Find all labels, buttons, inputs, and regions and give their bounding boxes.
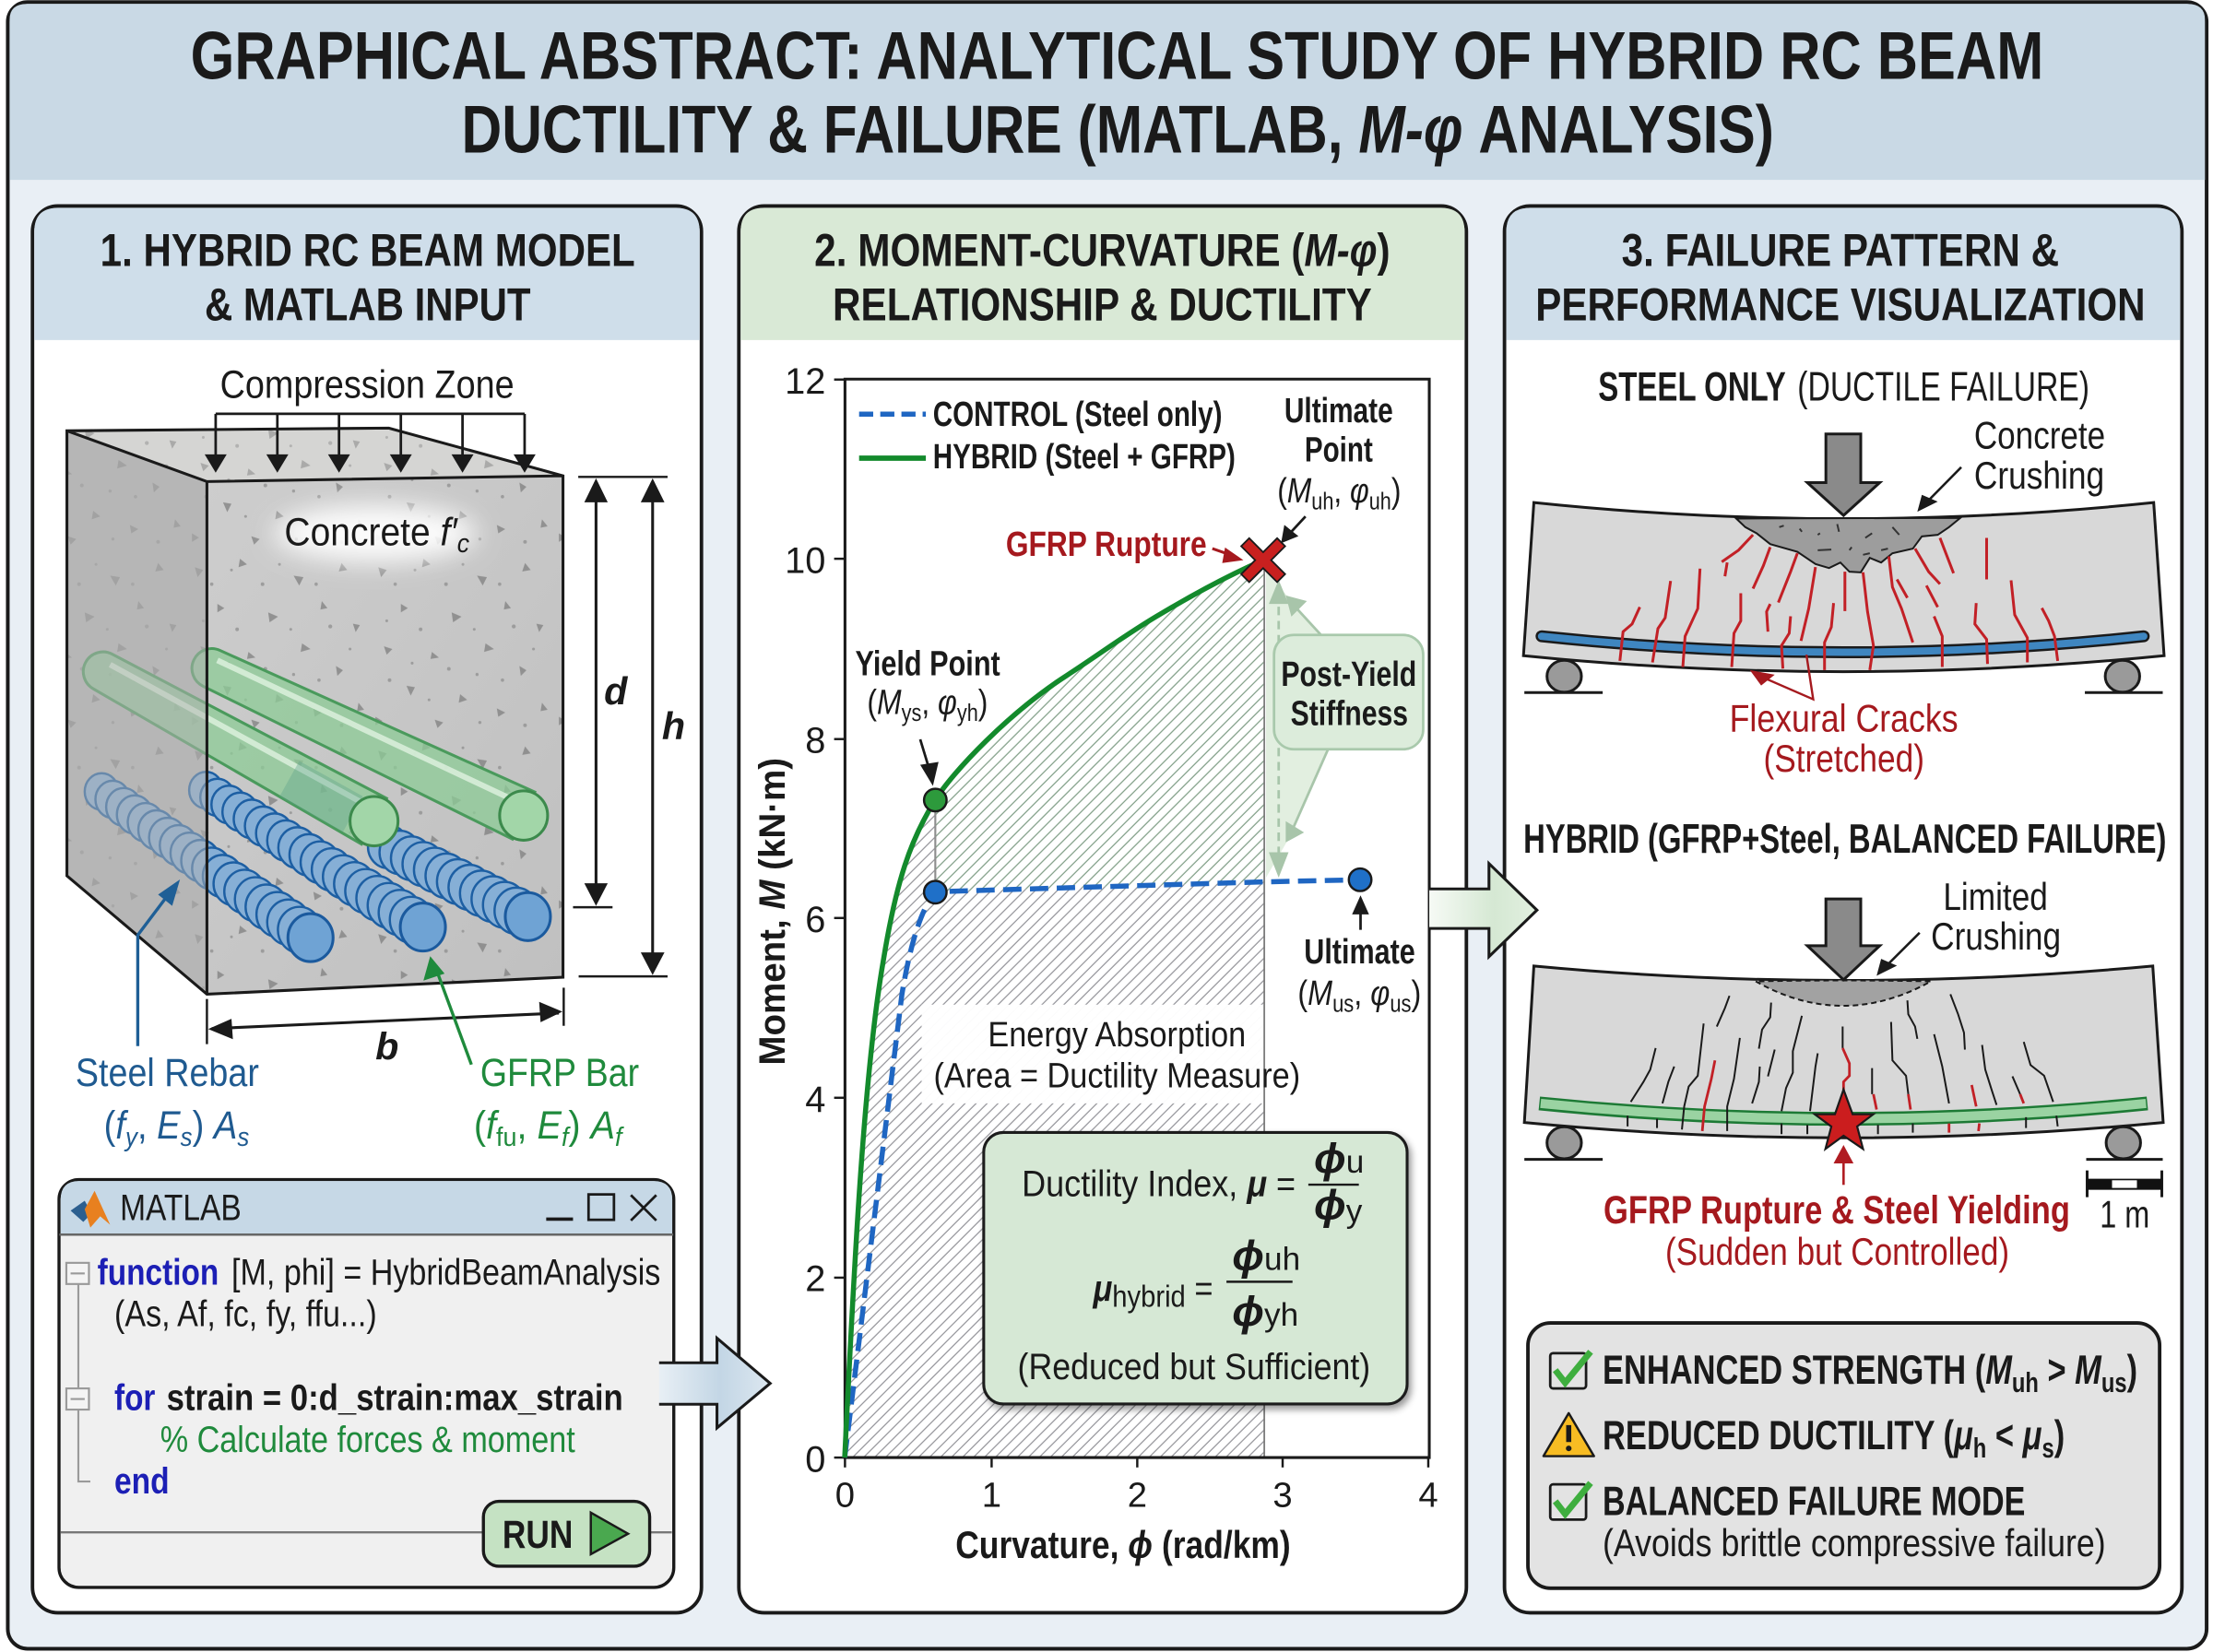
x axis tick labels [835, 1476, 1438, 1516]
GFRP bar callout: fu [496, 1123, 517, 1152]
limited crushing label [1931, 876, 2061, 958]
limited crushing label: Crushing [1931, 915, 2061, 958]
panel 1 heading: & MATLAB INPUT [205, 277, 531, 330]
post-yield stiffness callout: Post-Yield [1281, 655, 1416, 694]
legend [859, 395, 1236, 477]
steel rebar callout: (f [104, 1103, 126, 1148]
hybrid yield point marker: φ [938, 682, 957, 722]
summary box: M [2075, 1348, 2102, 1393]
panel 1: hybrid RC beam model and MATLAB input [32, 206, 702, 1612]
steel rebar callout: s [181, 1123, 193, 1152]
concrete crushing label [1974, 415, 2105, 497]
hybrid yield point marker: yh [957, 699, 978, 726]
GFRP bar [1539, 1103, 2148, 1119]
legend: HYBRID (Steel + GFRP) [933, 437, 1236, 477]
dimension h [579, 478, 685, 976]
MATLAB code: strain = 0:d_strain:max_strain [167, 1377, 623, 1418]
dimension h: h [662, 705, 685, 748]
ductility index box: μ [1093, 1268, 1112, 1309]
hybrid yield point marker: ys [902, 699, 921, 726]
ductility index box: ϕu [1314, 1134, 1364, 1182]
rupture and yielding label: GFRP Rupture & Steel Yielding [1604, 1188, 2070, 1233]
GFRP rupture marker: GFRP Rupture [1006, 525, 1207, 564]
ultimate point label: φ [1350, 471, 1369, 511]
RUN button [483, 1502, 650, 1566]
flexural cracks label: (Stretched) [1763, 738, 1924, 780]
steel-only heading: STEEL ONLY [1598, 365, 1786, 410]
panel 2 heading: 2. MOMENT-CURVATURE (M-φ) [814, 224, 1391, 277]
x axis tick labels: 0 [835, 1476, 855, 1516]
MATLAB code: [M, phi] = HybridBeamAnalysis [231, 1252, 660, 1292]
red rupture arrow [1834, 1145, 1853, 1185]
crushing pointer arrow [1917, 467, 1961, 512]
compression zone label and arrows [205, 363, 536, 473]
y axis tick labels: 8 [805, 721, 825, 761]
control ultimate marker and label: , [1354, 974, 1370, 1013]
crushing pointer arrow [1876, 933, 1920, 976]
chart axes [752, 361, 1438, 1566]
flexural cracks [1620, 535, 2058, 670]
control ultimate marker and label: Ultimate [1304, 932, 1415, 972]
y axis title: Moment, M (kN·m) [752, 758, 793, 1066]
control ultimate marker and label: ) [1412, 974, 1421, 1013]
red cracks [1702, 1048, 2024, 1133]
panel 1 heading [101, 224, 635, 330]
MATLAB window: MATLAB [120, 1187, 242, 1228]
rupture and yielding label: (Sudden but Controlled) [1665, 1231, 2009, 1273]
ductility index box: Ductility Index, μ = [1022, 1164, 1296, 1205]
y axis tick labels: 12 [785, 361, 825, 402]
GFRP bar callout [423, 956, 639, 1152]
steel rebar callout: E [157, 1103, 181, 1148]
y axis tick labels: 0 [805, 1439, 825, 1480]
limited crushing label: Limited [1943, 876, 2048, 918]
scale bar label: 1 m [2100, 1194, 2149, 1236]
hybrid yield point marker: ) [978, 682, 988, 722]
y axis tick labels: 6 [805, 900, 825, 940]
GFRP bar callout: GFRP Bar [480, 1051, 639, 1095]
x axis tick labels: 3 [1272, 1476, 1293, 1516]
ultimate point label: (M [1277, 471, 1317, 511]
panel 1 heading: 1. HYBRID RC BEAM MODEL [101, 224, 635, 277]
x axis title: Curvature, ϕ (rad/km) [955, 1524, 1291, 1566]
crack pointer arrow [1750, 655, 1813, 700]
concrete crushing zone [1736, 518, 1960, 572]
x axis tick labels: 2 [1128, 1476, 1147, 1516]
y axis tick labels: 4 [805, 1080, 825, 1120]
title [191, 18, 2043, 167]
GFRP bar callout: (f [474, 1103, 497, 1148]
steel rebars [85, 772, 550, 962]
energy absorption hatched area [844, 560, 1264, 1457]
y axis tick labels [785, 361, 825, 1480]
steel rebar callout: Steel Rebar [76, 1051, 259, 1095]
hybrid yield point marker: , [921, 682, 938, 722]
ductility index box: ϕuh [1232, 1232, 1300, 1280]
dimension b: b [375, 1025, 398, 1068]
panel 2: moment-curvature relationship and ductility [659, 206, 2182, 1612]
summary box: < [1986, 1413, 2023, 1458]
hybrid beam diagram [1524, 899, 2163, 1198]
flow arrow: MATLAB to chart [659, 1339, 770, 1428]
GFRP bar callout: E [538, 1103, 562, 1148]
title: DUCTILITY & FAILURE (MATLAB, M-φ ANALYSIS) [462, 90, 1774, 167]
ductility index box: (Reduced but Sufficient) [1018, 1347, 1370, 1387]
concrete crushing label: Crushing [1974, 454, 2104, 497]
load arrow [1807, 899, 1880, 980]
compression zone label and arrows: Compression Zone [220, 363, 515, 407]
control ultimate marker and label: us [1390, 989, 1412, 1017]
icon: rupture star [1815, 1090, 1874, 1149]
window controls [546, 1195, 657, 1221]
hybrid curve: steel plus GFRP [845, 560, 1263, 1457]
ultimate point label: uh [1369, 488, 1391, 515]
dimension d [573, 477, 668, 907]
summary box: h [1973, 1433, 1986, 1464]
summary box [1528, 1323, 2160, 1588]
MATLAB code: (As, Af, fc, fy, ffu...) [114, 1294, 377, 1335]
dimension b [207, 987, 563, 1068]
MATLAB code: end [114, 1461, 170, 1502]
GFRP rupture marker [1006, 525, 1299, 596]
concrete beam block [67, 428, 563, 994]
icon: MATLAB logo [71, 1191, 110, 1228]
energy absorption label: (Area = Ductility Measure) [934, 1056, 1300, 1095]
MATLAB code: for [114, 1377, 155, 1418]
flexural cracks label: Flexural Cracks [1730, 697, 1959, 739]
steel rebar callout: ) [193, 1103, 214, 1148]
black cracks [1627, 995, 2058, 1134]
ductility index box: y [1346, 1193, 1363, 1229]
summary box: BALANCED FAILURE MODE [1603, 1479, 2025, 1524]
scale bar [2087, 1171, 2162, 1198]
legend: CONTROL (Steel only) [933, 395, 1223, 434]
load arrow [1807, 434, 1880, 515]
ultimate point label: uh [1311, 488, 1333, 515]
summary box: s [2042, 1433, 2054, 1464]
ultimate point label [1277, 391, 1401, 543]
steel-only heading: (DUCTILE FAILURE) [1797, 365, 2089, 410]
ductility index box [984, 1132, 1407, 1404]
steel rebar [1542, 636, 2144, 653]
y axis tick labels: 10 [785, 540, 825, 581]
panel 3: failure pattern and performance visualization [1505, 206, 2182, 1612]
summary box: ENHANCED STRENGTH (M [1603, 1348, 2096, 1393]
icon: check balanced failure [1550, 1483, 1591, 1519]
control yield point marker [924, 881, 947, 903]
energy absorption label [934, 1015, 1300, 1095]
icon: warning triangle [1544, 1413, 1594, 1457]
summary box: REDUCED DUCTILITY (μ [1603, 1413, 2054, 1458]
steel-only beam diagram [1523, 434, 2164, 700]
limited crushing zone [1756, 981, 1931, 1006]
ultimate point label: ) [1391, 471, 1401, 511]
GFRP bar callout: , [517, 1103, 538, 1148]
ductility index box: ϕ [1314, 1180, 1346, 1228]
deflected concrete beam [1523, 502, 2164, 672]
control ultimate marker and label: φ [1370, 974, 1390, 1013]
GFRP bar callout: f [562, 1123, 571, 1152]
ultimate point label: Point [1305, 430, 1373, 469]
GFRP bar callout: A [588, 1103, 615, 1148]
x axis tick labels: 1 [982, 1476, 1001, 1516]
concrete label: c [457, 529, 469, 559]
flexural cracks label [1730, 697, 1959, 780]
ductility index box: = [1186, 1268, 1213, 1309]
MATLAB window [59, 1180, 674, 1587]
steel rebar callout: s [237, 1123, 249, 1152]
summary box: μ [2021, 1413, 2042, 1458]
hybrid yield point marker [856, 644, 1000, 811]
hybrid yield point marker: Yield Point [856, 644, 1000, 684]
ultimate point label: , [1333, 471, 1350, 511]
y axis tick labels: 2 [805, 1258, 825, 1299]
GFRP bar callout: ) [568, 1103, 591, 1148]
control curve: steel only [845, 879, 1360, 1457]
panel 2 heading [814, 224, 1391, 330]
flow arrow: chart to failure patterns [1429, 864, 1537, 957]
code fold markers [66, 1263, 90, 1481]
hybrid yield point marker: (M [867, 682, 906, 722]
steel rebar callout: , [137, 1103, 157, 1148]
summary box: (Avoids brittle compressive failure) [1603, 1522, 2106, 1564]
x axis tick labels: 4 [1418, 1476, 1438, 1516]
post-yield stiffness callout [1266, 572, 1423, 878]
roller supports [1524, 1127, 2162, 1160]
control ultimate marker and label [1297, 868, 1421, 1017]
control ultimate marker and label: us [1332, 989, 1354, 1017]
summary box: > [2039, 1348, 2075, 1393]
header band [9, 4, 2205, 180]
RUN button: RUN [503, 1513, 573, 1557]
panel 3 heading [1535, 224, 2146, 330]
deflected concrete beam [1524, 966, 2163, 1138]
steel rebar callout: A [211, 1103, 237, 1148]
ductility index box: ϕyh [1232, 1287, 1298, 1335]
steel rebar callout [76, 879, 259, 1152]
energy absorption label: Energy Absorption [988, 1015, 1246, 1055]
roller supports [1524, 660, 2162, 692]
summary box: ) [2127, 1348, 2137, 1393]
summary box: us [2101, 1367, 2127, 1398]
panel 3 heading: 3. FAILURE PATTERN & [1622, 224, 2059, 277]
MATLAB code: function [98, 1252, 219, 1292]
steel rebar callout: y [124, 1123, 138, 1152]
GFRP bar callout: f [615, 1123, 624, 1152]
summary box: uh [2012, 1367, 2039, 1398]
concrete label: Concrete f′ [284, 510, 458, 554]
control ultimate marker and label: (M [1297, 974, 1337, 1013]
steel-only heading [1598, 365, 2089, 410]
MATLAB code: % Calculate forces & moment [160, 1420, 575, 1460]
icon: check enhanced strength [1550, 1351, 1591, 1388]
ultimate point label: Ultimate [1284, 391, 1393, 431]
ductility index box: hybrid [1112, 1280, 1186, 1314]
post-yield stiffness callout: Stiffness [1291, 694, 1408, 734]
MATLAB code [98, 1252, 660, 1502]
summary box: ) [2054, 1413, 2065, 1458]
GFRP bars [83, 649, 548, 846]
dimension d: d [604, 670, 628, 713]
rupture and yielding label [1604, 1188, 2070, 1273]
panel 2 heading: RELATIONSHIP & DUCTILITY [833, 277, 1372, 330]
concrete crushing label: Concrete [1974, 415, 2105, 457]
